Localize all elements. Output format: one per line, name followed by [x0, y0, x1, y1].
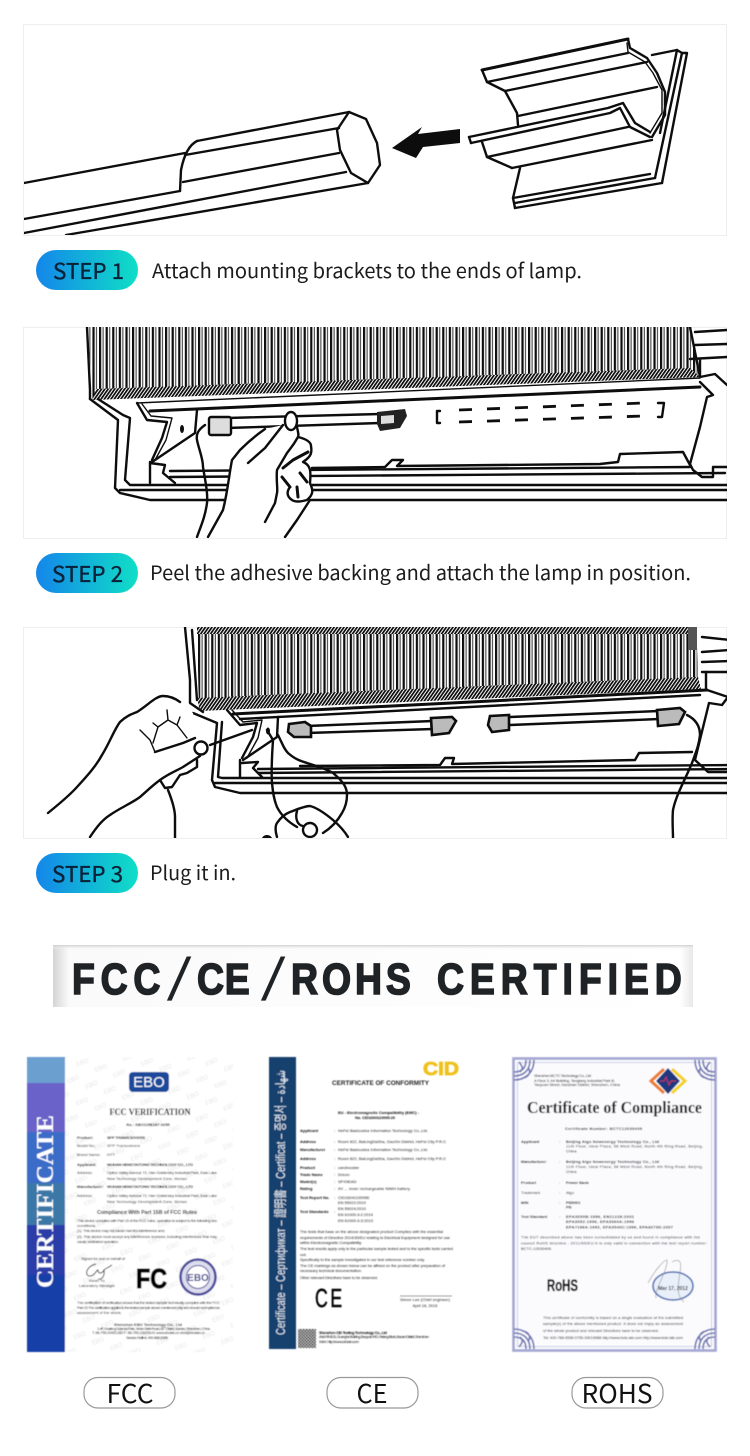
step 3 caption: Plug it in.	[150, 857, 236, 886]
FCC certificate body text: Service Hotline: 400-888-6396	[126, 1335, 169, 1340]
RoHS mark: RoHS	[547, 1276, 578, 1295]
CE certificate body text: Rating	[300, 1186, 313, 1191]
panel: step 3 illustration	[24, 627, 730, 838]
ROHS certificate body text: 11th Floor, Ideal Plaza, 58 West Road, North 4th Ring Road, Beijing,	[566, 1144, 703, 1148]
ROHS footer text: This certificate of conformity is based on a single evaluation of the submitted	[543, 1315, 683, 1320]
BCTC address: A Floor 3, A4 Building, Tangtang Industrial Park B,	[534, 1078, 615, 1083]
FCC certificate body text: Manufacturer:	[77, 1184, 104, 1189]
FCC certificate body text: FCC VERIFICATION	[110, 1108, 191, 1118]
certificate: CE	[269, 1057, 459, 1349]
label pill: ROHS: ROHS	[582, 1374, 652, 1411]
heading banner: certifications: ROHS	[291, 954, 411, 1004]
CE certificate body text: :	[334, 1147, 335, 1152]
FCC certificate body text: The certification of verification shows that the tested sample technically complies with the FCC	[77, 1300, 220, 1305]
CE certificate body text: Room 822, BaiLingDaSha, GaoXin District, HeFei City P.R.C	[338, 1139, 446, 1144]
FCC certificate body text: No.: EBO1206187-4255	[126, 1122, 170, 1127]
ROHS certificate body text: EPA3050B:1996, EN11228:2001	[566, 1214, 635, 1219]
CE certificate body text: :	[334, 1128, 335, 1133]
ROHS certificate body text: Test Standard	[521, 1214, 548, 1219]
FCC certificate body text: New Technology Development Zone, Wuhan	[107, 1176, 187, 1181]
FCC certificate body text: Kevin Yu	[89, 1278, 105, 1283]
CE certificate body text: Model(s)	[300, 1179, 317, 1184]
CE certificate body text: EU - Electromagnetic Compatibility (EMC) -	[338, 1110, 420, 1115]
CE certificate body text: Product	[300, 1165, 316, 1170]
BCTC address: Taoyuan Street, Nanshan District, Shenzhen, China	[534, 1082, 621, 1087]
BCTC logo	[651, 1068, 685, 1094]
step 2 badge	[36, 553, 138, 593]
ROHS certificate body text: China	[566, 1148, 577, 1154]
ROHS certificate body text: :	[559, 1200, 560, 1205]
FCC certificate body text: Laboratory Manager	[79, 1283, 116, 1288]
CE certificate body text: EN 61000-3-2:2014	[338, 1212, 374, 1217]
CE certificate body text: CID1604110095E	[338, 1195, 370, 1200]
CE certificate body text: Room 822, BaiLingDaSha, GaoXin District, HeFei City P.R.C	[338, 1156, 446, 1161]
dashed outline end brackets	[437, 403, 664, 423]
CE certificate body text: Other relevant Directives have to be observed.	[300, 1275, 378, 1280]
FCC certificate body text: WUHAN HENGTAITONG TECHNOLOGY CO., LTD	[107, 1162, 193, 1167]
dashed lamp outline	[459, 403, 644, 422]
certificate: FCC	[27, 1057, 233, 1352]
CE mark: CE	[315, 1284, 342, 1313]
certificate sidebar: Certificate – Сертификат – 證明書 – Certificat – 증명서 – شهادة	[273, 1070, 289, 1335]
CID company address	[319, 1330, 429, 1344]
ROHS certificate body text: :	[559, 1159, 560, 1164]
ROHS certificate body text: Aigo	[566, 1190, 575, 1195]
CE certificate body text: :	[334, 1186, 335, 1191]
certificate sidebar	[269, 1057, 296, 1349]
step 1 label: STEP 1	[53, 254, 124, 286]
CE certificate body text: Manufacturer	[300, 1147, 326, 1152]
ROHS footer text	[543, 1315, 684, 1340]
FCC certificate body text: Shenzhen EBO Technology Co., Ltd	[114, 1322, 183, 1327]
panel: step 1 illustration	[24, 24, 726, 236]
heading banner: certifications: /	[259, 945, 287, 1013]
engineer signature block: Simon Lee (Chief engineer)	[400, 1297, 451, 1302]
CE certificate body text: EN 61000-3-3:2013	[338, 1218, 374, 1223]
stamp and signature	[648, 1260, 693, 1302]
ROHS certificate body text: Beijing Aigo Newenergy Technology Co., Ltd	[566, 1139, 660, 1144]
FCC certificate body text: New Technology Development Zone, Wuhan	[107, 1199, 187, 1204]
ROHS certificate body text: Certificate Number: BCTC12030409	[565, 1126, 643, 1131]
CID company address: Shenzhen CID Testing Technology Co., Ltd	[319, 1330, 388, 1335]
CE certificate body text: CERTIFICATE OF CONFORMITY	[332, 1080, 429, 1087]
ROHS certificate body text: PB	[566, 1204, 572, 1210]
CE certificate body text: No. CID1604110095-29	[355, 1115, 396, 1120]
ROHS certificate body text: M/N	[521, 1200, 528, 1205]
FCC certificate body text: Signed for and on behalf of	[81, 1256, 126, 1261]
BCTC address: Shenzhen BCTC Technology Co., Ltd	[534, 1073, 591, 1078]
FCC certificate body text: Applicant:	[77, 1162, 97, 1167]
CE certificate body text: EN 55022:2010	[338, 1200, 367, 1205]
CE certificate body text: :	[334, 1172, 335, 1177]
CID company address: Web: http://www.cid-lab.com	[319, 1339, 360, 1344]
EBO logo	[129, 1072, 169, 1092]
certificate: ROHS	[512, 1057, 717, 1352]
FCC certificate body text: conditions.	[77, 1223, 96, 1228]
label pill: FCC	[84, 1374, 175, 1411]
step 2 label: STEP 2	[52, 557, 123, 589]
ROHS certificate body text: Applicant	[521, 1139, 540, 1144]
mounting bracket	[469, 39, 687, 208]
CE certificate body text: Dricon	[338, 1172, 350, 1177]
CE certificate body text: EN 55024:2010	[338, 1206, 367, 1211]
CE certificate body text: out.	[300, 1252, 307, 1257]
step 3 badge	[36, 853, 138, 893]
engineer signature block: April 18, 2016	[413, 1303, 438, 1308]
QR code	[298, 1329, 316, 1348]
ROHS certificate body text: Power Bank	[566, 1180, 590, 1185]
ROHS certificate body text: Trademark	[521, 1190, 540, 1195]
label pill: FCC: FCC	[106, 1374, 154, 1411]
FCC certificate body text: assessment of the whole.	[77, 1310, 122, 1315]
CE certificate body text: within Electromagnetic Compatibility.	[300, 1240, 362, 1245]
FCC certificate body text: Model No.:	[77, 1143, 96, 1148]
EBO seal: EBO	[187, 1273, 209, 1284]
step 3 label: STEP 3	[52, 857, 123, 889]
FCC certificate body text: (2). This device must accept any interference received, including interference that may	[77, 1234, 217, 1239]
ROHS certificate body text: Product	[521, 1180, 537, 1185]
hand holding plug	[48, 696, 252, 838]
ROHS certificate body text	[521, 1126, 707, 1251]
lamp with mounted end	[24, 112, 380, 235]
arrow pointing to lamp	[392, 127, 460, 158]
CE certificate body text: Applicant	[300, 1128, 319, 1133]
CE certificate body text: HeFei Basicustus Information Technology Co.,Ltd.	[338, 1128, 428, 1133]
CE certificate body text: 9V ... inner rechargeable NiMH battery	[338, 1186, 410, 1191]
FCC certificate body text: This device complies with Part 15 of the FCC rules, operation is subject to the following two	[77, 1218, 218, 1223]
BCTC address	[534, 1073, 621, 1087]
two lamps with clips	[288, 708, 685, 737]
step 2 caption: Peel the adhesive backing and attach the lamp in position.	[150, 557, 691, 586]
ROHS certificate body text: Manufacturer	[521, 1159, 547, 1164]
CID company address: Add: RM101, Guanghe Building, Baoyuan RD, Xixiang Block, Baoan District, Shenzhen	[319, 1334, 429, 1339]
FCC certificate body text: WUHAN HENGTAITONG TECHNOLOGY CO., LTD	[107, 1184, 193, 1189]
FCC certificate body text: HTT	[107, 1152, 115, 1157]
CE certificate body text: carobooster	[338, 1165, 360, 1170]
CE certificate body text: Specifically to the sample investigated in our test reference number only.	[300, 1257, 425, 1262]
panel: step 2 illustration	[24, 327, 730, 538]
CE certificate body text: necessary technical documentation.	[300, 1268, 362, 1273]
CE certificate body text: The test results apply only to the particular sample tested and to the specific tests carried	[300, 1246, 453, 1251]
ROHS footer text: sample(s) of the above mentioned product. It does not imply an assessment	[543, 1321, 684, 1326]
label pill: CE: CE	[356, 1374, 388, 1411]
CE certificate body text: :	[334, 1179, 335, 1184]
CE certificate body text	[300, 1080, 453, 1280]
ROHS certificate body text: :	[559, 1190, 560, 1195]
second hand at bottom	[262, 806, 348, 838]
step 2 badge and caption	[36, 553, 691, 593]
ROHS certificate body text: Beijing Aigo Newenergy Technology Co., Ltd	[566, 1159, 660, 1164]
ROHS certificate body text: PB5001	[566, 1200, 581, 1205]
CE certificate body text: Trade Name	[300, 1172, 323, 1177]
engineer signature block	[400, 1296, 452, 1308]
certificate sidebar	[27, 1057, 65, 1352]
FCC certificate body text: Address:	[77, 1193, 93, 1198]
ROHS certificate body text: :	[559, 1139, 560, 1144]
CE certificate body text: requirements of Directive 2014/30/EU relating to Electrical Equipment designed for use	[300, 1235, 451, 1240]
EBO logo: EBO	[133, 1074, 165, 1091]
FC logo: FC	[136, 1263, 167, 1294]
FCC certificate body text: T: 86-755-29451282 F: 86-755-23929141 www.ebolab.cn ebo@ebolab.cn	[92, 1330, 205, 1335]
heading banner: certifications: FCC	[72, 954, 160, 1004]
hand holding lamp	[197, 412, 313, 538]
CE certificate body text: :	[334, 1165, 335, 1170]
ROHS certificate body text: EPA7196A:1992, EPA3540C:1996, EPA8270D:2007	[566, 1224, 674, 1230]
FCC certificate body text: Product:	[77, 1135, 93, 1140]
fixture body	[90, 330, 730, 500]
step 3 badge and caption	[36, 853, 236, 893]
FCC certificate body text: Optics Valley Avenue 72, Han Goldensky Industrial Park, East Lake	[107, 1170, 218, 1175]
ROHS certificate body text: council RoHS directive - 2011/65/EU.It is only valid in connection with the test report number:	[521, 1240, 707, 1246]
ROHS certificate body text: The EUT described above has been consolidated by us and found in compliance with the	[521, 1234, 701, 1240]
FCC certificate body text: SFP TRANSCEIVERS	[107, 1135, 145, 1140]
CE certificate body text: The tests that base on the above designated product Complies with the essential	[300, 1229, 443, 1234]
FCC certificate body text: (1). This device may not cause harmful interference and;	[77, 1228, 165, 1233]
FCC certificate body text: Brand Name:	[77, 1152, 101, 1157]
CE certificate body text: Address	[300, 1156, 317, 1161]
heat sink fins	[185, 627, 701, 712]
heat sink fins	[87, 327, 700, 400]
lamp with clips	[209, 409, 407, 435]
ROHS footer text: of the whole product and relevant Directives have to be observed.	[543, 1328, 659, 1333]
ROHS footer text: Tel: 400-788-9558 0755-33019988 http://www.bctc-lab.com http://www.bctc-lab.com	[543, 1335, 684, 1340]
step 1 caption: Attach mounting brackets to the ends of lamp.	[152, 255, 582, 284]
FCC certificate body text	[77, 1108, 220, 1340]
ROHS certificate body text: BCTC-12030409.	[521, 1246, 552, 1251]
CE certificate body text: :	[334, 1156, 335, 1161]
heading banner: certifications: CE	[197, 954, 250, 1004]
CE certificate body text: SPX9EAD	[338, 1179, 357, 1184]
FCC certificate body text: Optics Valley Avenue 72, Han Goldensky Industrial Park, East Lake	[107, 1193, 218, 1198]
ROHS certificate body text: EPA3052:1996, EPA3060A:1996	[566, 1219, 635, 1224]
FCC certificate body text: 1-4F, Huafeng Science Park, Xin'an Sixth Road, 82° District, Bao'an, Shenzhen, China	[97, 1326, 211, 1331]
FCC certificate body text: SFP Transceivers	[107, 1143, 140, 1148]
CE certificate body text: Test Report No.	[300, 1195, 329, 1200]
heading banner: certifications: /	[165, 945, 193, 1013]
CE certificate body text: :	[334, 1139, 335, 1144]
CE certificate body text: :	[334, 1209, 335, 1214]
label pill: CE	[327, 1374, 418, 1411]
signature	[87, 1264, 112, 1279]
ROHS certificate body text: :	[559, 1180, 560, 1185]
EBO seal	[180, 1260, 216, 1294]
stamp and signature: Mar 17, 2012	[658, 1286, 688, 1292]
FCC certificate body text: Compliance With Part 15B of FCC Rules	[97, 1210, 197, 1216]
FCC certificate body text: Address:	[77, 1170, 93, 1175]
heading banner: certifications	[53, 945, 693, 1013]
fixture body	[193, 637, 730, 793]
ROHS certificate body text: :	[559, 1214, 560, 1219]
CE certificate body text: Test Standards	[300, 1209, 329, 1214]
CE certificate body text: The CE markings as shown below can be affixed on the product after preparation of	[300, 1263, 446, 1268]
FCC certificate body text: cause undesired operation.	[77, 1239, 119, 1244]
CE certificate body text: Address	[300, 1139, 317, 1144]
power cords	[168, 715, 700, 838]
ROHS certificate body text: 11th Floor, Ideal Plaza, 58 West Road, North 4th Ring Road, Beijing,	[566, 1164, 703, 1169]
FCC certificate body text: Part 15.The certification applies to the tested sample above mentioned only and should not implied an	[77, 1305, 220, 1310]
CE certificate body text: :	[334, 1195, 335, 1200]
ROHS certificate title: Certificate of Compliance	[527, 1098, 702, 1117]
step 1 badge and caption	[36, 250, 582, 290]
certificate sidebar: CERTIFICATE	[33, 1115, 59, 1288]
CID logo: CID	[423, 1059, 459, 1079]
ROHS certificate body text: China	[566, 1169, 577, 1174]
certificate border	[512, 1057, 717, 1352]
CE certificate body text: HeFei Basicustus Information Technology Co.,Ltd.	[338, 1147, 428, 1152]
step 1 badge	[36, 250, 138, 290]
heading banner: certifications: CERTIFIED	[437, 954, 682, 1004]
